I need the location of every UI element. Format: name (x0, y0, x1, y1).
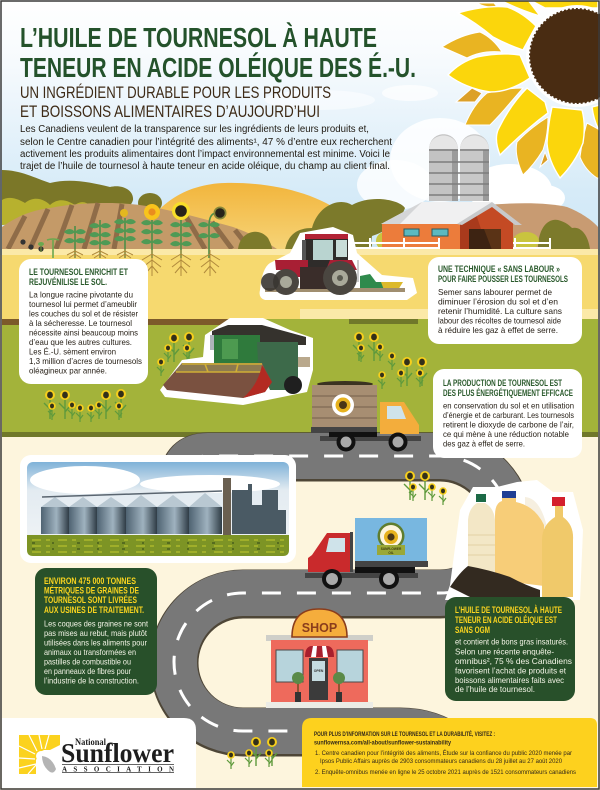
body: no-till: retenir l’humidité. La culture sans (438, 306, 562, 316)
card: no-till (428, 257, 582, 344)
body: no-till: diminuer l’érosion du sol et d’en (438, 296, 558, 306)
subtitle (20, 83, 331, 121)
heading: processing: ENVIRON 475 000 TONNES (44, 576, 136, 587)
body: no-till: à réduire les gaz à effet de serre. (438, 325, 558, 335)
seedlings and growing sunflowers (20, 202, 227, 276)
footer: sources: 1. Centre canadien pour l’intégrité des aliments, Étude sur la confiance du public 2020 menée par (315, 748, 573, 757)
body: soil: à la sécheresse. Le tournesol (29, 318, 132, 328)
body: soil: La longue racine pivotante du (29, 290, 133, 300)
heading: soil: LE TOURNESOL ENRICHIT ET (29, 267, 128, 278)
body: non-GMO: boissons alimentaires faits avec (455, 675, 564, 685)
heading: processing: TOURNESOL SONT LIVRÉES (44, 594, 137, 606)
card: processing (35, 568, 157, 695)
body: energy: ce qui mène à une réduction notable (443, 429, 569, 439)
red delivery truck: OIL (388, 551, 394, 555)
intro text (20, 124, 392, 172)
heading: energy (443, 378, 573, 399)
red delivery truck: SUNFLOWER (381, 547, 402, 551)
combine harvester sticker (160, 318, 313, 405)
body: soil: oléagineux par année. (29, 366, 107, 376)
intro text: activement les produits alimentaires dont l’impact environnemental est minime. Voici le (20, 149, 391, 160)
card: non-GMO (445, 597, 575, 701)
small sunflowers group (227, 737, 277, 769)
body: non-GMO: favorisent l’achat de produits et (455, 666, 567, 676)
clouds (265, 85, 565, 216)
body: soil: les couches du sol et de résister (29, 308, 138, 318)
body: processing (44, 618, 149, 686)
tractor sticker (260, 227, 417, 300)
logo panel (2, 718, 196, 788)
body: energy: retirent le dioxyde de carbone de l’air, (443, 420, 574, 430)
heading: soil (29, 267, 128, 288)
body: non-GMO: Selon une récente enquête- (455, 646, 554, 656)
orange grain truck (311, 381, 421, 452)
body: processing: l’industrie de la construction. (44, 676, 139, 686)
intro text: trajet de l’huile de tournesol à haute teneur en acide oléique, du champ au client final. (20, 161, 390, 172)
footer: sources: sunflowernsa.com/all-about/sunflower-sustainability (314, 740, 451, 746)
small sunflowers group (157, 332, 194, 376)
yellow field (2, 249, 598, 319)
icon: barn (381, 202, 522, 250)
body: no-till: Semer sans labourer permet de (438, 287, 552, 297)
pale field band (2, 249, 598, 319)
title: L’HUILE DE TOURNESOL À HAUTE (20, 22, 377, 53)
body: soil (29, 290, 142, 376)
heading: non-GMO: SANS OGM (455, 625, 490, 636)
heading: processing (44, 576, 144, 616)
icon: grain silos (429, 134, 489, 201)
dark field strip (2, 319, 598, 437)
heading: no-till (438, 264, 568, 285)
red delivery truck (305, 518, 428, 589)
body: soil: tournesol lui permet d’ameublir (29, 299, 137, 309)
logo wordmark: National (75, 737, 106, 747)
road (174, 456, 508, 749)
body: energy: en conservation du sol et en utilisation (443, 400, 574, 410)
body: soil: 1,3 million d’acres de tournesols (29, 356, 142, 366)
body: soil: Les É.-U. sèment environ (29, 346, 116, 356)
oil bottles sticker (445, 480, 583, 600)
shop (266, 609, 373, 708)
body: non-GMO (455, 636, 572, 694)
small sunflowers group (353, 332, 427, 389)
intro text: Les Canadiens veulent de la transparence sur les ingrédients de leurs produits et, (20, 124, 369, 135)
landscape hills and trees (2, 170, 598, 251)
subtitle: UN INGRÉDIENT DURABLE POUR LES PRODUITS (20, 83, 331, 102)
title (20, 22, 416, 83)
heading: processing: AUX USINES DE TRAITEMENT. (44, 605, 144, 616)
body: energy: d’énergie et de carburant. Les tournesols (443, 410, 574, 420)
body: non-GMO: omnibus², 75 % des Canadiens (455, 656, 572, 666)
body: no-till: labour des récoltes de tournesol aide (438, 316, 561, 326)
footer: sources: 2. Enquête-omnibus menée en ligne le 25 octobre 2021 auprès de 1521 consommateurs canadiens (315, 769, 576, 776)
photo: processing plant (20, 455, 296, 563)
card: energy (433, 369, 582, 458)
fences (354, 238, 551, 250)
body: processing: pastilles de combustible ou (44, 656, 131, 666)
shop: SHOP (302, 621, 337, 635)
logo wordmark: Sunflower (61, 738, 174, 768)
body: no-till (438, 287, 562, 335)
green field (2, 319, 598, 437)
small sunflowers group (404, 471, 447, 505)
body: energy (443, 400, 574, 448)
heading: soil: REJUVÉNILISE LE SOL. (29, 276, 107, 288)
subtitle: ET BOISSONS ALIMENTAIRES D’AUJOURD’HUI (20, 102, 320, 121)
body: energy: des gaz à effet de serre. (443, 438, 525, 448)
footer: sources (302, 718, 597, 787)
sky (0, 0, 600, 255)
small sunflowers group (44, 389, 126, 422)
heading: processing: MÉTRIQUES DE GRAINES DE (44, 584, 139, 596)
shop: OPEN (314, 669, 324, 673)
intro text: selon le Centre canadien pour l’intégrité des aliments¹, 47 % d’entre eux recherchent (20, 137, 392, 148)
body: soil: d’eau que les autres cultures. (29, 337, 132, 347)
body: processing: utilisées dans les aliments pour (44, 638, 147, 648)
title: TENEUR EN ACIDE OLÉIQUE DES É.-U. (20, 52, 416, 83)
body: non-GMO: de l’huile de tournesol. (455, 684, 535, 694)
footer: sources: Ipsos Public Affairs auprès de 2903 consommateurs canadiens du 28 juillet au 27 août 2020 (320, 758, 562, 765)
brown soil band (2, 319, 252, 325)
heading: non-GMO (455, 604, 562, 636)
icon: large sunflower (442, 0, 600, 178)
logo wordmark: ASSOCIATION (62, 766, 174, 774)
body: processing: animaux ou transformées en (44, 647, 136, 657)
body: processing: Les coques des graines ne sont (44, 618, 149, 628)
footer: sources: POUR PLUS D’INFORMATION SUR LE TOURNESOL ET LA DURABILITÉ, VISITEZ : (314, 729, 495, 738)
body: non-GMO: et contient de bons gras insaturés. (455, 636, 568, 646)
card: soil (19, 259, 148, 384)
body: processing: en panneaux de fibres pour (44, 666, 131, 676)
icon: logo sunflower (19, 735, 60, 774)
body: processing: pas mises au rebut, mais plutôt (44, 628, 148, 638)
body: soil: nécessite ainsi beaucoup moins (29, 328, 138, 338)
